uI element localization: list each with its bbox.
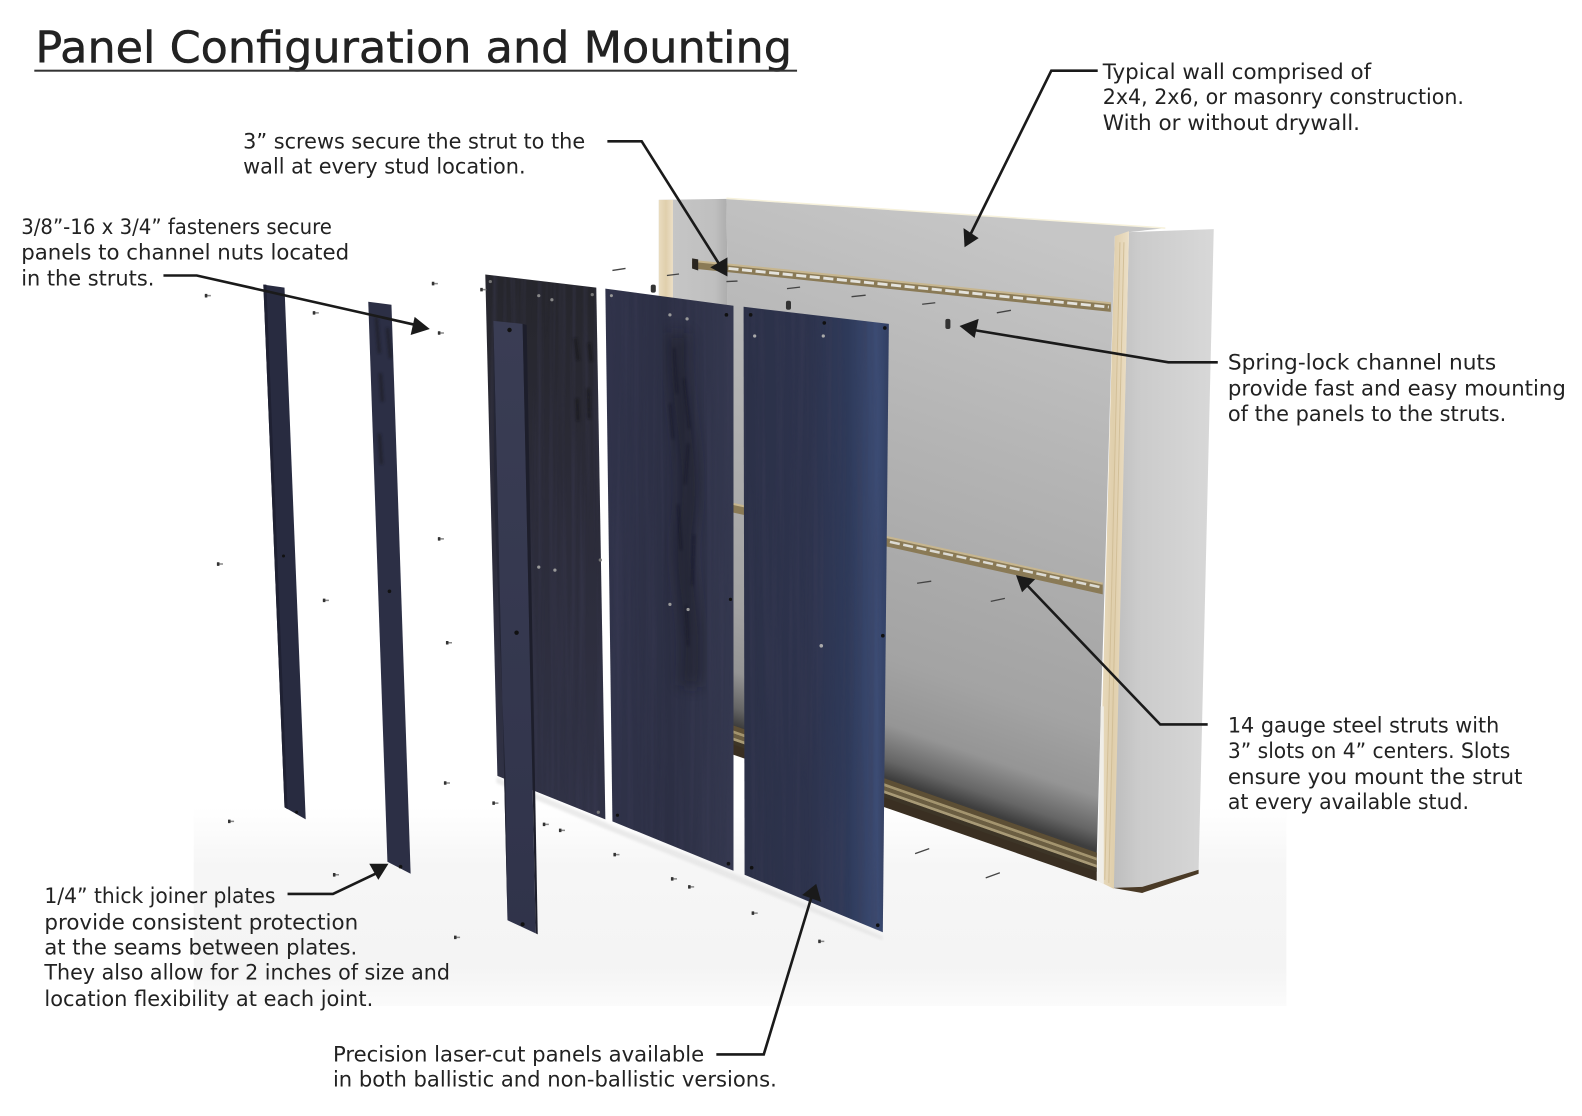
wall: left plywood edge bbox=[659, 200, 673, 303]
joiner plate front bbox=[493, 321, 538, 934]
wall: white end face bbox=[1113, 229, 1214, 888]
callout: typical wall bbox=[1102, 59, 1464, 135]
callout: steel struts: ensure you mount the strut bbox=[1228, 764, 1522, 789]
joiner plate left bbox=[263, 285, 306, 819]
arrow: steel struts bbox=[1016, 575, 1208, 724]
callout: typical wall: 2x4, 2x6, or masonry construction. bbox=[1103, 84, 1464, 109]
callout: fasteners: 3/8”-16 x 3/4” fasteners secure bbox=[21, 214, 332, 239]
arrow: laser-cut panels bbox=[716, 884, 821, 1054]
callout: joiner plates: 1/4” thick joiner plates bbox=[44, 883, 275, 908]
callout: steel struts bbox=[1228, 713, 1522, 814]
arrow: screws bbox=[607, 141, 727, 277]
callout: steel struts: at every available stud. bbox=[1228, 789, 1469, 814]
callout: screws: 3” screws secure the strut to the bbox=[243, 128, 585, 153]
callout: channel nuts: Spring-lock channel nuts bbox=[1228, 349, 1496, 374]
strut: bottom with base plate bbox=[733, 725, 1097, 881]
ballistic panel front bbox=[743, 306, 892, 936]
callout: screws: wall at every stud location. bbox=[243, 154, 526, 179]
floor shadow bbox=[194, 777, 1286, 1006]
arrow: joiner plates bbox=[288, 864, 388, 894]
callout: laser-cut panels bbox=[333, 1041, 777, 1092]
callout: fasteners bbox=[21, 214, 349, 291]
callout: typical wall: With or without drywall. bbox=[1103, 110, 1360, 135]
callout: steel struts: 14 gauge steel struts with bbox=[1228, 713, 1499, 738]
callout: channel nuts bbox=[1228, 349, 1566, 426]
callout: joiner plates bbox=[43, 883, 450, 1011]
wall: plywood end bbox=[1098, 231, 1129, 889]
callout: joiner plates: They also allow for 2 inches of size and bbox=[43, 960, 450, 985]
callout: fasteners: panels to channel nuts located bbox=[21, 239, 349, 264]
callout: laser-cut panels: Precision laser-cut panels available bbox=[333, 1041, 704, 1066]
ballistic panel back bbox=[484, 272, 610, 827]
wall bbox=[659, 198, 1214, 893]
callout: joiner plates: provide consistent protection bbox=[44, 909, 358, 934]
title: Panel Configuration and Mounting bbox=[35, 24, 792, 74]
wall: left return face bbox=[659, 199, 733, 782]
callout: typical wall: Typical wall comprised of bbox=[1102, 59, 1372, 84]
callout: channel nuts: provide fast and easy mounting bbox=[1228, 376, 1566, 401]
arrow: typical wall bbox=[964, 71, 1098, 247]
callout: joiner plates: at the seams between plates. bbox=[44, 935, 357, 960]
wall: interior face bbox=[726, 199, 1165, 856]
strut: middle bbox=[733, 504, 1103, 594]
callout: laser-cut panels: in both ballistic and non-ballistic versions. bbox=[333, 1067, 777, 1092]
screws and fasteners bbox=[205, 268, 1011, 941]
callout: screws bbox=[243, 128, 585, 179]
strut: top bbox=[692, 258, 1111, 312]
arrow: fasteners bbox=[163, 276, 430, 335]
arrow: channel nuts bbox=[959, 319, 1218, 362]
callout: channel nuts: of the panels to the struts. bbox=[1228, 401, 1506, 426]
joiner plate second bbox=[368, 302, 411, 874]
callout: fasteners: in the struts. bbox=[21, 266, 154, 291]
ballistic panel middle bbox=[605, 288, 737, 873]
callout: steel struts: 3” slots on 4” centers. Slots bbox=[1228, 738, 1510, 763]
callout: joiner plates: location flexibility at each joint. bbox=[44, 986, 373, 1011]
